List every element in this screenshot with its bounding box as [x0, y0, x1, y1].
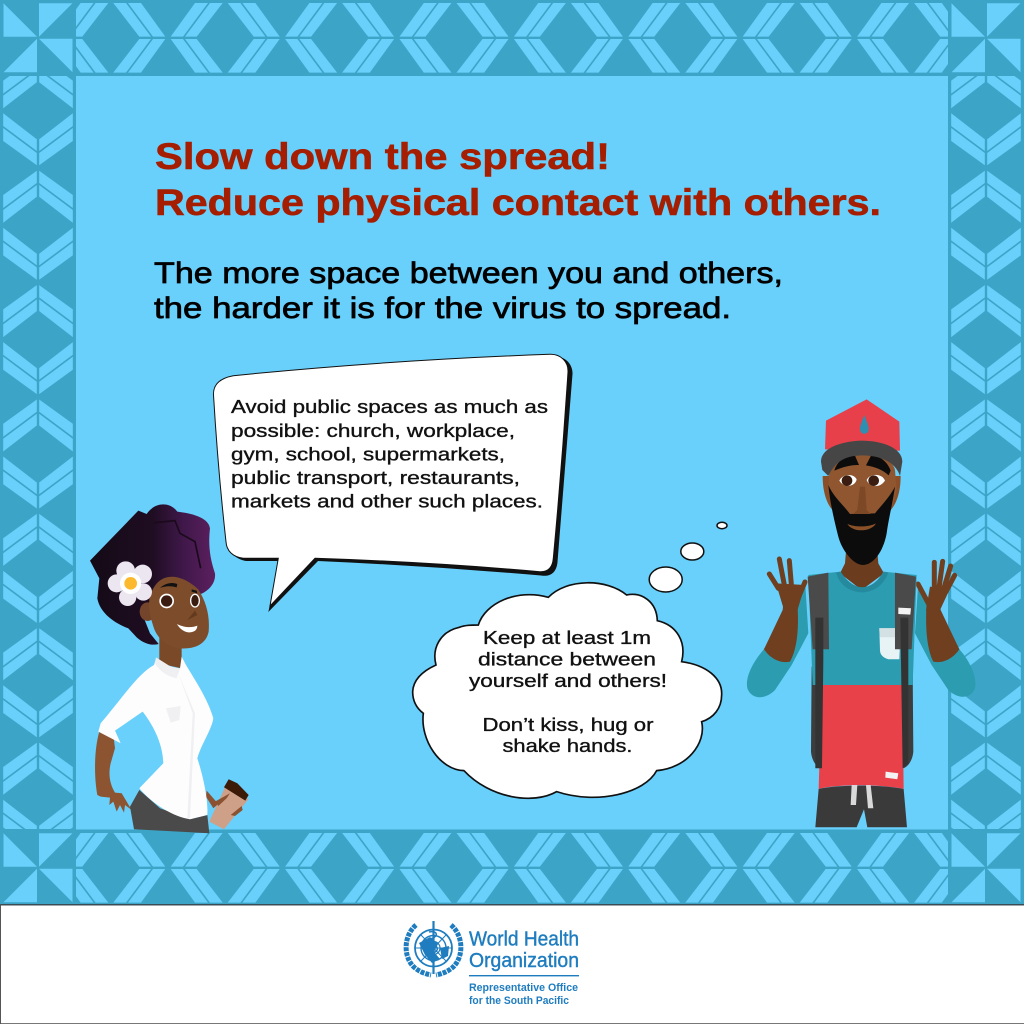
footer bottom rule [0, 1023, 1024, 1024]
title: Slow down the spread! [155, 136, 610, 177]
man forearms and hands [764, 559, 959, 662]
cloud text: shake hands. [502, 735, 632, 756]
man brows and eyes [834, 456, 891, 514]
corner pinwheel top left [4, 3, 72, 72]
man neck [840, 552, 884, 590]
man backpack straps [808, 573, 916, 649]
title: Reduce physical contact with others. [155, 182, 881, 223]
main light blue panel [76, 76, 948, 830]
subtitle: The more space between you and others, [154, 257, 783, 290]
footer left rule [0, 904, 1, 1024]
woman arm [95, 732, 132, 813]
subtitle [154, 257, 783, 325]
cloud text: yourself and others! [469, 670, 667, 691]
flower [108, 561, 152, 606]
WHO logo [406, 921, 579, 1007]
thought cloud [413, 522, 727, 798]
man shorts [815, 786, 907, 827]
man backpack side [811, 667, 913, 768]
office name [469, 982, 578, 1007]
speech bubble [213, 354, 573, 612]
woman face [140, 577, 209, 648]
office name: Representative Office [469, 982, 578, 994]
corner pinwheel bottom left [4, 833, 72, 902]
bottom pattern band [76, 833, 948, 903]
WHO wordmark [469, 928, 579, 972]
bubble text: public transport, restaurants, [231, 467, 520, 488]
bubble text: gym, school, supermarkets, [231, 444, 505, 464]
cloud text: distance between [478, 648, 656, 670]
corner pinwheel top right [952, 3, 1020, 72]
woman neck [159, 637, 182, 668]
thought bubble medium [681, 543, 704, 560]
clothing tags [885, 608, 911, 779]
woman character [90, 504, 249, 833]
man ears [823, 476, 901, 512]
WHO wordmark: Organization [469, 950, 579, 972]
WHO emblem [406, 921, 461, 975]
thought bubble small [717, 522, 727, 529]
subtitle: the harder it is for the virus to spread. [154, 292, 731, 325]
man character [747, 399, 975, 827]
bubble text: markets and other such places. [231, 490, 543, 512]
right pattern band [951, 76, 1021, 829]
cloud text: Don’t kiss, hug or [482, 714, 654, 735]
man pocket [879, 628, 901, 659]
woman skirt [130, 790, 209, 833]
thought bubble large [649, 567, 682, 592]
woman back arm and hand [206, 791, 218, 808]
cloud outline [413, 583, 722, 798]
shorts drawstrings [851, 785, 873, 808]
man t-shirt [808, 572, 917, 685]
bubble text: possible: church, workplace, [231, 420, 515, 441]
footer top rule [0, 904, 1024, 906]
bubble text [231, 396, 548, 512]
bubble shadow [217, 356, 573, 612]
WHO wordmark: World Health [469, 928, 579, 950]
cloud text [469, 627, 667, 756]
man sleeves [747, 580, 975, 697]
bubble text: Avoid public spaces as much as [231, 396, 548, 417]
woman shirt details [155, 657, 195, 818]
man apron [819, 685, 904, 789]
woman shirt [98, 657, 213, 819]
cloud text: Keep at least 1m [483, 627, 651, 648]
white logo footer [0, 904, 1024, 1024]
man cap [821, 399, 902, 476]
bubble body [213, 354, 568, 606]
coffee cup [209, 779, 249, 829]
corner pinwheel bottom right [952, 833, 1020, 902]
man beard [828, 485, 895, 565]
man lower straps [815, 618, 908, 768]
logo rule [469, 975, 579, 976]
left pattern band [3, 76, 73, 829]
top pattern band [76, 3, 948, 73]
title [155, 136, 881, 223]
man collar [836, 572, 888, 592]
man face [828, 455, 897, 523]
woman hair [90, 504, 215, 645]
office name: for the South Pacific [469, 995, 569, 1007]
